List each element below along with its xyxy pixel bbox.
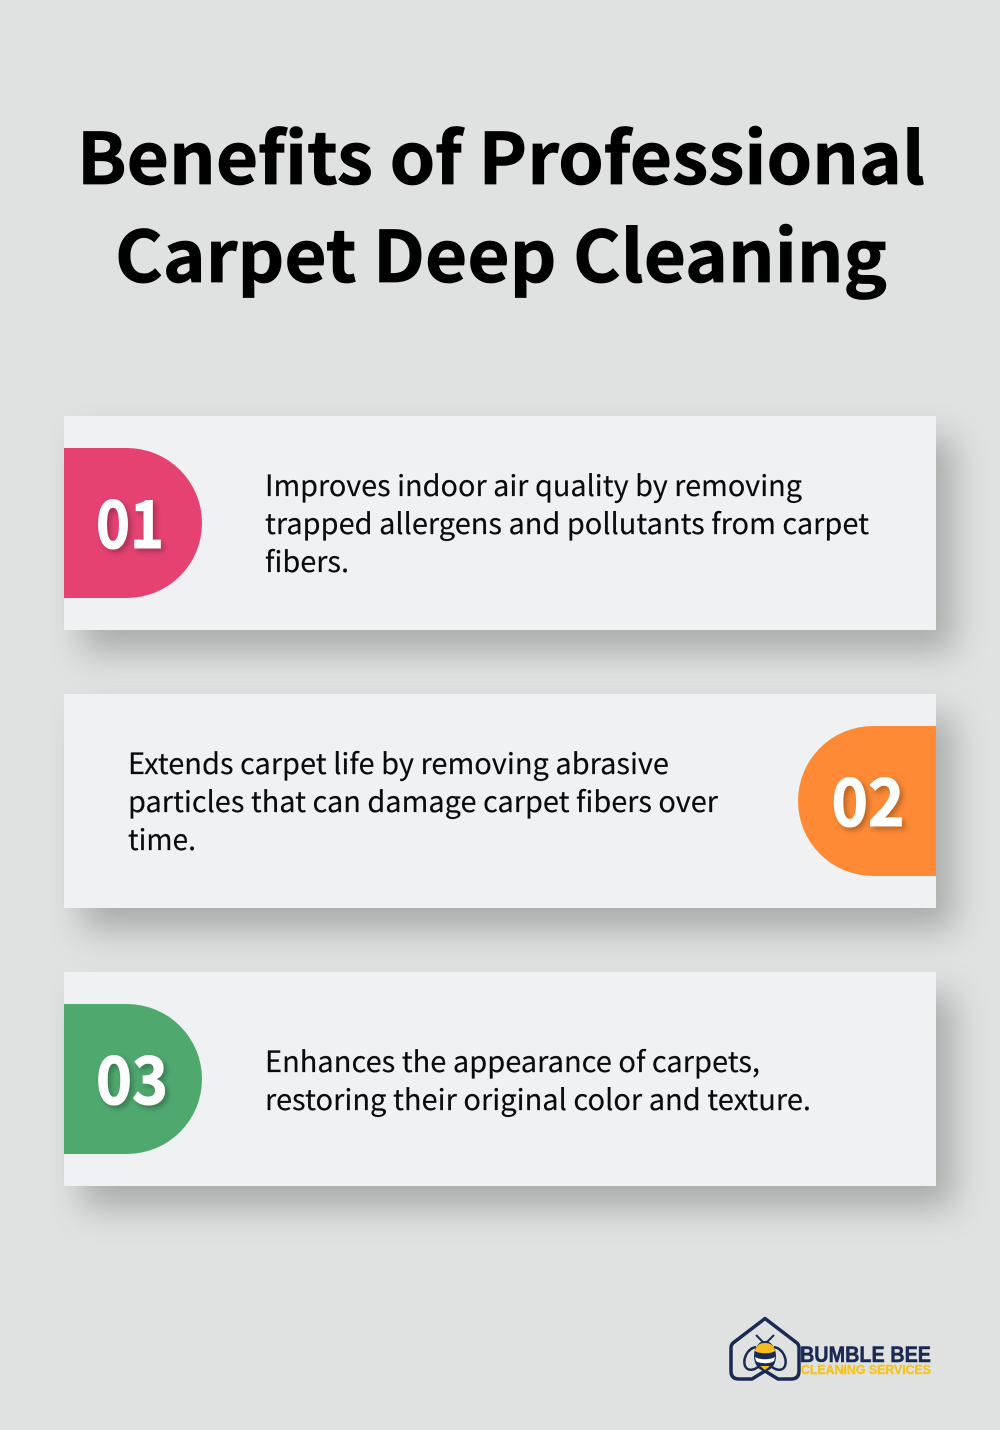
logo tagline: CLEANING SERVICES	[801, 1363, 931, 1377]
badge: 02: 02	[832, 750, 904, 846]
panel: benefit 03	[64, 972, 936, 1186]
text: benefit 02: particles that can damage carpet fibers over	[128, 779, 719, 821]
badge: 03: 03	[96, 1028, 168, 1124]
title	[77, 103, 925, 303]
text: benefit 02: time.	[128, 817, 196, 859]
logo wordmark: BUMBLE BEE	[800, 1342, 931, 1367]
panel: benefit 02	[64, 694, 936, 908]
text: benefit 03	[265, 1039, 811, 1119]
badge: 02	[798, 726, 936, 876]
text: benefit 03: Enhances the appearance of carpets,	[265, 1039, 760, 1081]
text: benefit 01: trapped allergens and pollutants from carpet	[265, 501, 869, 543]
icon: house outline	[731, 1318, 799, 1379]
badge: 01	[64, 448, 202, 598]
panel: benefit 01	[64, 416, 936, 630]
text: benefit 03: restoring their original color and texture.	[265, 1077, 811, 1119]
title: Carpet Deep Cleaning	[115, 201, 887, 303]
text: benefit 01	[265, 463, 869, 581]
title: Benefits of Professional	[77, 103, 925, 205]
text: benefit 02	[128, 741, 719, 859]
badge: 03	[64, 1004, 202, 1154]
text: benefit 01: fibers.	[265, 539, 349, 581]
icon: bee	[744, 1335, 786, 1371]
logo: Bumble Bee Cleaning Services	[731, 1318, 931, 1379]
text: benefit 02: Extends carpet life by removing abrasive	[128, 741, 669, 783]
text: benefit 01: Improves indoor air quality by removing	[265, 463, 802, 505]
badge: 01: 01	[96, 472, 164, 568]
